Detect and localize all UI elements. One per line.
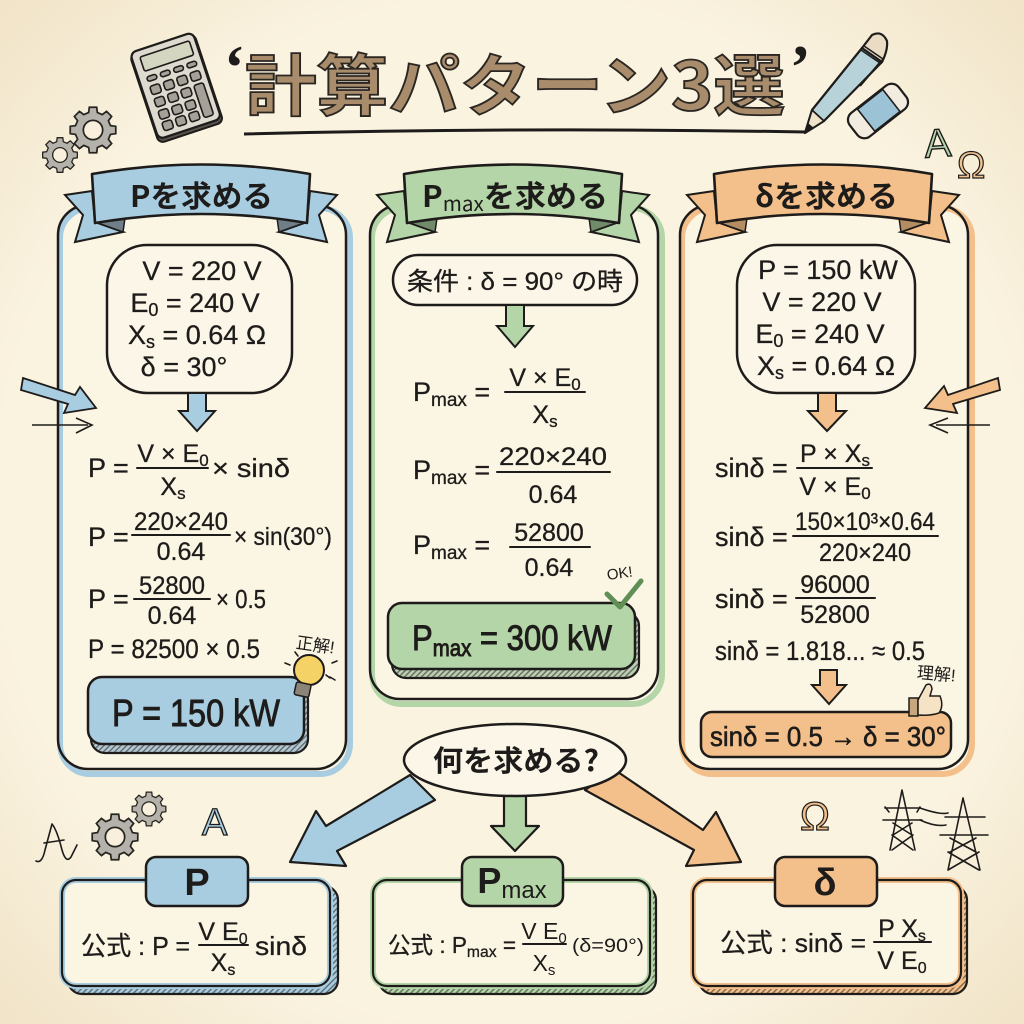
given values bubble: = 240 V — [783, 319, 885, 349]
formula step 1: X — [532, 401, 549, 429]
result box: sinδ = 0.5 → δ = 30° — [710, 721, 946, 752]
formula step 2: × sin(30°) — [234, 523, 332, 551]
tab: P — [184, 862, 210, 904]
icon: omega: Ω — [957, 145, 985, 187]
icon: gears top left — [43, 107, 116, 172]
given values bubble: 0 — [773, 331, 783, 351]
panel: P — [58, 164, 350, 774]
card — [373, 880, 656, 994]
note: understood: 理解! — [916, 663, 956, 686]
icon: eraser — [844, 80, 912, 142]
formula: 0 — [918, 960, 927, 977]
given values bubble: E — [130, 288, 148, 318]
arrow down — [497, 305, 533, 347]
arrow to delta — [585, 770, 741, 866]
formula — [388, 918, 644, 979]
tab: δ — [813, 862, 837, 904]
formula step 3 — [413, 519, 590, 582]
card — [62, 880, 338, 994]
formula step 1: 0 — [861, 484, 871, 503]
ribbon — [65, 164, 337, 242]
icon: omega: Ω — [800, 795, 830, 839]
panel: delta — [680, 164, 972, 774]
formula: sinδ — [255, 931, 307, 961]
note: correct: 正解! — [295, 633, 336, 658]
formula: 0 — [239, 931, 248, 948]
condition bubble — [393, 255, 637, 305]
arrow to P — [290, 775, 435, 866]
given values bubble: E — [755, 319, 773, 349]
given values bubble: s — [146, 332, 155, 352]
formula step 4: sinδ = 1.818... ≈ 0.5 — [715, 636, 925, 666]
formula step 1: × sinδ — [212, 453, 290, 483]
formula step 1: X — [160, 473, 177, 501]
formula step 2: P — [413, 455, 431, 485]
tab — [775, 857, 877, 906]
formula step 3: = — [467, 530, 490, 560]
formula step 2 — [413, 443, 610, 509]
formula step 1: V × E — [137, 440, 199, 468]
formula step 1 — [715, 440, 872, 503]
panel frame — [680, 205, 972, 774]
formula: 公式 : P = — [81, 931, 190, 961]
given values bubble: = 0.64 Ω — [155, 320, 266, 350]
result box — [701, 712, 951, 757]
given values bubble: V = 220 V — [762, 287, 882, 317]
result box — [88, 677, 308, 753]
given values bubble — [737, 245, 915, 393]
icons bottom left — [36, 792, 228, 862]
formula step 2: 0.64 — [157, 538, 205, 566]
tab: max — [501, 877, 547, 904]
result box: max — [433, 635, 472, 661]
arrows right side — [925, 378, 1000, 433]
icons bottom right — [800, 790, 988, 870]
icon: pencil — [805, 33, 887, 133]
formula step 3: 0.64 — [148, 602, 196, 630]
icon: check mark — [607, 581, 641, 607]
result box: = 300 kW — [471, 619, 612, 658]
formula step 1: P — [413, 377, 431, 407]
formula: (δ=90°) — [572, 936, 644, 957]
icon: gears — [92, 792, 166, 860]
title quote right: ’ — [790, 34, 811, 102]
arrow down — [808, 393, 846, 431]
given values bubble: X — [128, 320, 146, 350]
formula: s — [548, 962, 555, 979]
arrows left side — [21, 378, 96, 433]
formula step 3 — [715, 571, 875, 629]
given values bubble: P = 150 kW — [758, 255, 898, 285]
formula step 3: 0.64 — [525, 554, 573, 582]
result box: P — [412, 619, 435, 658]
formula card: delta — [693, 857, 967, 994]
formula step 2: sinδ = — [715, 522, 788, 552]
formula — [81, 918, 307, 979]
arrow down — [179, 393, 215, 431]
formula: 0 — [558, 930, 567, 947]
formula step 1: V × E — [799, 473, 861, 501]
formula: 公式 : P — [388, 932, 469, 958]
panel: Pmax — [370, 164, 662, 704]
title quote left: ‘ — [224, 34, 245, 102]
formula step 2: = — [467, 455, 490, 485]
ribbon: Pを求める — [130, 172, 273, 216]
formula: 公式 : sinδ = — [720, 928, 866, 958]
icon: wave — [36, 824, 77, 862]
formula step 3: × 0.5 — [216, 584, 266, 614]
ribbon: を求める — [484, 172, 608, 216]
icon: letter A: A — [923, 121, 953, 167]
formula: s — [918, 928, 926, 945]
formula: V E — [521, 918, 558, 944]
ribbon — [377, 164, 649, 242]
formula step 3: 96000 — [800, 571, 870, 599]
icon: letter A: A — [202, 802, 228, 844]
formula step 3: 52800 — [800, 601, 870, 629]
formula step 3: 52800 — [514, 519, 584, 547]
given values bubble — [107, 245, 292, 393]
formula step 1 — [413, 364, 585, 431]
formula step 1 — [88, 440, 290, 503]
icon: light bulb — [285, 652, 337, 698]
formula step 1: P = — [88, 453, 129, 483]
question bubble — [404, 724, 626, 796]
formula — [720, 915, 931, 977]
formula step 2: 150×10³×0.64 — [795, 508, 935, 536]
given values bubble: δ = 30° — [141, 352, 227, 382]
formula: V E — [877, 947, 918, 975]
formula step 1: s — [177, 484, 186, 503]
result box — [388, 603, 639, 678]
ribbon: max — [443, 188, 484, 217]
given values bubble: V = 220 V — [142, 256, 262, 286]
formula step 1: P × X — [800, 440, 861, 468]
formula step 2: P = — [88, 522, 129, 552]
formula step 2: 220×240 — [499, 443, 607, 471]
icon: thumbs up — [909, 684, 942, 716]
panel frame — [370, 205, 662, 704]
formula: X — [211, 949, 227, 977]
formula step 1: = — [467, 377, 490, 407]
ribbon — [687, 164, 959, 242]
formula step 2: 0.64 — [529, 481, 577, 509]
formula step 2 — [715, 508, 938, 567]
formula: X — [533, 950, 548, 976]
formula: V E — [198, 918, 239, 946]
formula step 2 — [88, 508, 332, 566]
formula: = — [497, 932, 516, 958]
formula step 3: sinδ = — [715, 584, 788, 614]
icon: transmission towers — [883, 790, 988, 870]
given values bubble: s — [775, 363, 784, 383]
formula step 3: P = — [88, 584, 129, 614]
tab — [146, 857, 248, 906]
formula: s — [227, 962, 235, 979]
condition bubble: 条件 : δ = 90° の時 — [407, 268, 623, 296]
title text: 計算パターン3選 — [245, 33, 785, 130]
card — [693, 880, 967, 994]
formula step 1: max — [431, 390, 467, 411]
ribbon: P — [422, 172, 442, 216]
formula step 3 — [88, 572, 266, 630]
given values bubble: 0 — [148, 300, 158, 320]
formula step 1: sinδ = — [715, 453, 788, 483]
formula step 3: 52800 — [139, 572, 205, 600]
arrow small — [812, 670, 846, 704]
formula step 1: s — [549, 412, 558, 431]
title — [224, 33, 811, 134]
icon: calculator — [129, 32, 224, 143]
formula: P X — [878, 915, 918, 943]
formula card: Pmax — [373, 857, 656, 994]
formula step 1: s — [861, 451, 870, 470]
given values bubble: = 0.64 Ω — [784, 351, 895, 381]
formula: max — [467, 944, 497, 961]
title underline — [244, 130, 806, 134]
ribbon: δを求める — [755, 172, 898, 216]
formula card: P — [62, 857, 338, 994]
formula step 1: 0 — [199, 451, 209, 470]
arrow to Pmax — [491, 795, 539, 851]
result box: P = 150 kW — [112, 693, 280, 735]
given values bubble: = 240 V — [158, 288, 260, 318]
formula step 1: V × E — [509, 364, 571, 392]
tab — [462, 857, 563, 906]
panel frame — [58, 205, 350, 774]
formula step 3: max — [431, 543, 467, 564]
given values bubble: X — [757, 351, 775, 381]
formula step 2: 220×240 — [134, 508, 228, 536]
question bubble: 何を求める? — [433, 738, 599, 780]
formula step 1: 0 — [571, 375, 581, 394]
formula step 3: P — [413, 530, 431, 560]
formula step 4: P = 82500 × 0.5 — [88, 634, 260, 664]
tab: P — [477, 860, 501, 901]
note: OK: OK! — [606, 564, 634, 584]
formula step 2: max — [431, 468, 467, 489]
formula step 2: 220×240 — [819, 539, 911, 567]
